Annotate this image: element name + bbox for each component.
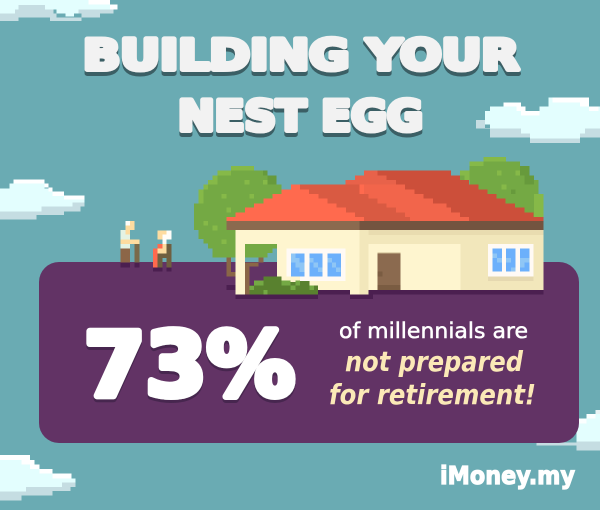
cloud: left xyxy=(0,179,85,219)
house xyxy=(226,171,543,299)
left window xyxy=(286,249,346,281)
cloud: upper right xyxy=(476,98,600,143)
tree canopy xyxy=(194,166,282,257)
statistic caption: for retirement! xyxy=(329,378,536,411)
roof xyxy=(226,171,543,221)
statistic caption: of millennials are xyxy=(339,319,528,343)
right window xyxy=(488,244,534,281)
illustration: elderly couple xyxy=(121,221,171,272)
roof: silhouette, front gable xyxy=(226,171,543,221)
statistic caption: not prepared xyxy=(345,345,524,378)
cloud: top left xyxy=(0,0,117,21)
wall shaded sections xyxy=(359,230,543,295)
trunk shadow xyxy=(226,285,236,290)
statistic caption xyxy=(329,319,536,411)
illustration: right tree xyxy=(460,157,543,222)
title: BUILDING YOUR xyxy=(83,30,519,80)
woman xyxy=(153,230,171,272)
house wall xyxy=(236,230,543,295)
eave xyxy=(226,221,359,230)
bush highlights xyxy=(249,277,314,295)
cloud: bottom left xyxy=(0,455,75,500)
panel: purple statistic panel xyxy=(39,262,579,443)
patio foliage xyxy=(245,244,277,262)
house shadow xyxy=(236,290,543,299)
bush xyxy=(249,277,318,295)
cloud: bottom right behind panel xyxy=(537,410,600,451)
title xyxy=(83,30,519,140)
roof: bright hip band xyxy=(346,180,469,221)
man xyxy=(121,221,139,267)
title: NEST EGG xyxy=(178,92,423,140)
illustration: left tree xyxy=(194,166,282,290)
logo: iMoney.my: iMoney.my xyxy=(440,461,575,490)
tree trunk xyxy=(226,257,236,277)
patio post and branch xyxy=(245,257,263,295)
roof: shaded band xyxy=(300,184,410,221)
roof: upper hip band xyxy=(346,171,396,185)
statistic: 73%: 73% xyxy=(84,314,295,416)
roof: back plane xyxy=(378,171,543,221)
door xyxy=(378,253,401,290)
